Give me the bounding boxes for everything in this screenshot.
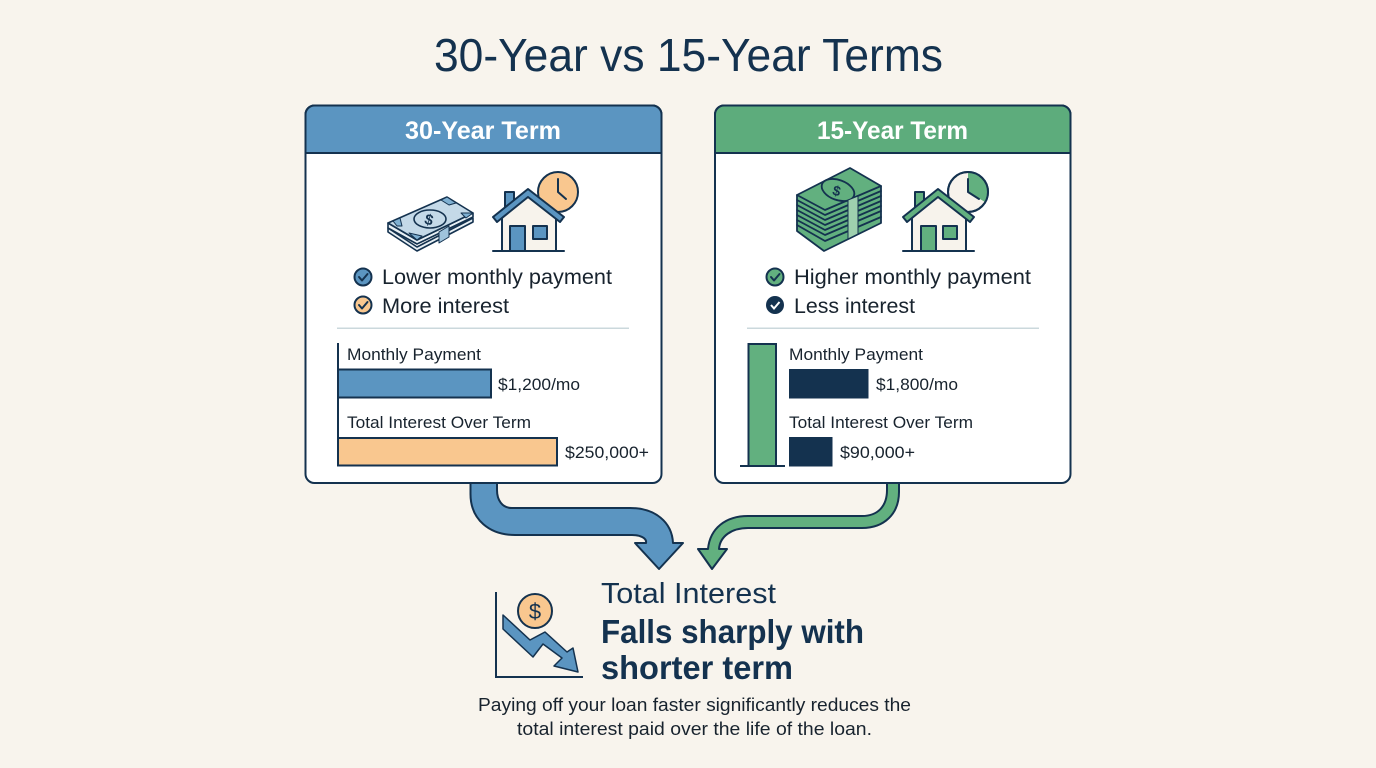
icon: falling interest chart: $ xyxy=(529,599,541,624)
icon: small cash stack xyxy=(388,197,473,251)
icon: large cash stack: $ xyxy=(831,182,843,199)
panel header: 30-year term: 30-Year Term xyxy=(405,117,561,145)
callout: total interest heading: Total Interest xyxy=(601,578,776,610)
panel: 30-year term xyxy=(306,106,662,483)
icon: large cash stack xyxy=(797,168,881,251)
arrow: 15-year term to total interest xyxy=(698,483,899,569)
label: total interest over term: Total Interest Over Term xyxy=(347,414,531,432)
panel header: 15-year term: 15-Year Term xyxy=(817,117,968,145)
explanatory text: total interest paid over the life of the loan. xyxy=(517,719,872,739)
bullet: higher monthly payment: Higher monthly payment xyxy=(794,266,1031,289)
callout: falls sharply with shorter term xyxy=(601,613,864,686)
bar chart: 30-year figures xyxy=(338,343,649,466)
bar: total interest 15-year xyxy=(789,437,832,466)
bar: monthly payment 30-year xyxy=(338,370,491,398)
bullet: more interest: More interest xyxy=(382,295,509,318)
value: $90,000+: $90,000+ xyxy=(840,444,915,462)
panel: 15-year term xyxy=(715,106,1070,483)
panel header: 15-year term xyxy=(715,106,1070,153)
bar: vertical green term bar xyxy=(740,344,785,466)
bullet: less interest: Less interest xyxy=(794,295,915,318)
label: total interest over term: Total Interest Over Term xyxy=(789,414,973,432)
explanatory text: Paying off your loan faster significantly reduces the xyxy=(478,695,911,715)
icon: falling interest chart xyxy=(496,592,583,677)
icon: small cash stack: $ xyxy=(423,211,436,230)
value: $250,000+: $250,000+ xyxy=(565,444,649,462)
value: $1,200/mo: $1,200/mo xyxy=(498,376,580,394)
bullet: lower monthly payment: Lower monthly payment xyxy=(382,266,612,289)
bar chart: 15-year figures xyxy=(740,344,973,466)
bar: total interest 30-year xyxy=(338,438,557,466)
arrow: 30-year term to total interest xyxy=(470,483,683,569)
panel header: 30-year term xyxy=(306,106,662,153)
title: 30-Year vs 15-Year Terms xyxy=(434,29,943,81)
icon: house with orange clock xyxy=(493,172,578,251)
label: monthly payment: Monthly Payment xyxy=(789,346,923,364)
icon: house with green clock xyxy=(903,172,988,251)
label: monthly payment: Monthly Payment xyxy=(347,346,481,364)
explanatory text xyxy=(478,695,911,739)
callout: falls sharply with shorter term: Falls sharply with xyxy=(601,613,864,650)
callout: total interest heading xyxy=(601,578,864,686)
value: $1,800/mo: $1,800/mo xyxy=(876,376,958,394)
bar: monthly payment 15-year xyxy=(789,369,868,398)
callout: falls sharply with shorter term: shorter term xyxy=(601,649,793,686)
